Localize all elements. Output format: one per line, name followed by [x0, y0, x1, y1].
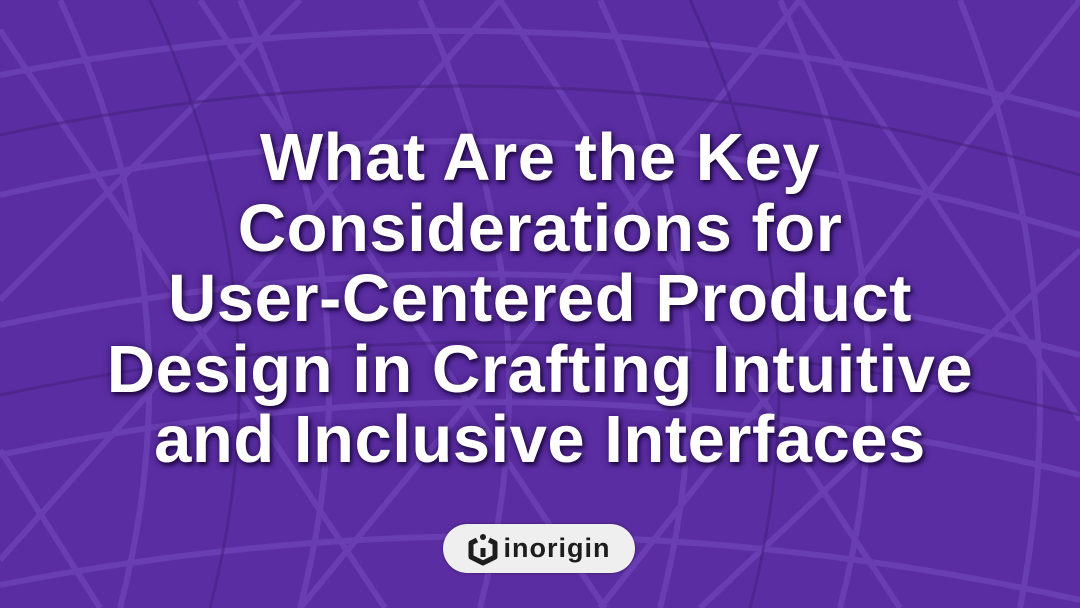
- title: and Inclusive Interfaces: [154, 402, 926, 477]
- icon: inorigin cube: [468, 534, 498, 566]
- title: Design in Crafting Intuitive: [107, 332, 973, 406]
- logo: inorigin: inorigin: [504, 533, 610, 563]
- title: What Are the Key: [260, 120, 820, 195]
- title: Considerations for: [238, 190, 842, 266]
- title: [107, 120, 976, 477]
- title: User-Centered Product: [168, 261, 912, 336]
- logo: inorigin: [443, 524, 635, 573]
